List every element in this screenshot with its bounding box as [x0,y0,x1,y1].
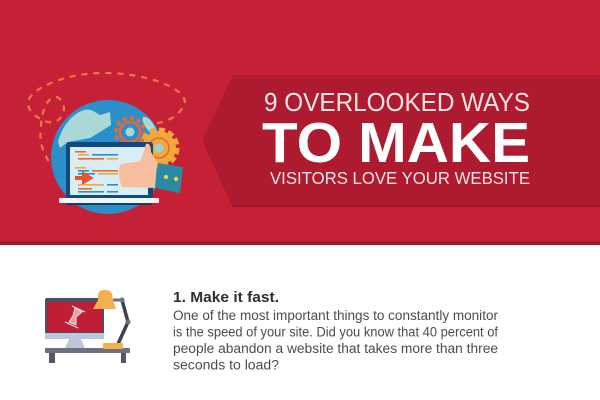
title line: 9 overlooked ways: 9 OVERLOOKED WAYS [264,89,530,117]
globe continents [58,109,111,148]
illustration: globe with laptop [28,73,185,214]
paragraph: seconds to load? [173,358,279,372]
yellow gear [141,130,177,166]
dashed orbit [28,73,185,175]
cuff [155,163,183,193]
title line: to make: TO MAKE [262,111,530,175]
paragraph [173,308,499,372]
title banner [203,75,600,207]
lamp [93,290,130,349]
hourglass [65,306,85,328]
desk [45,348,130,363]
text block: make it fast [173,290,499,372]
paragraph: people abandon a website that takes more than three [173,341,498,356]
icon: desk with monitor and lamp [45,290,130,363]
thumbs up hand [119,144,183,193]
paragraph: One of the most important things to constantly monitor [173,308,499,323]
heading: 1. Make it fast. [173,290,279,306]
paragraph: is the speed of your site. Did you know that 40 percent of [173,324,498,340]
orange outline gear [116,118,144,146]
laptop [59,142,159,205]
header background [0,0,600,245]
play arrow [75,171,94,185]
code lines [75,151,86,153]
globe [51,100,165,214]
monitor [45,298,104,348]
title line: visitors love your website: VISITORS LOVE YOUR WEBSITE [270,168,530,188]
